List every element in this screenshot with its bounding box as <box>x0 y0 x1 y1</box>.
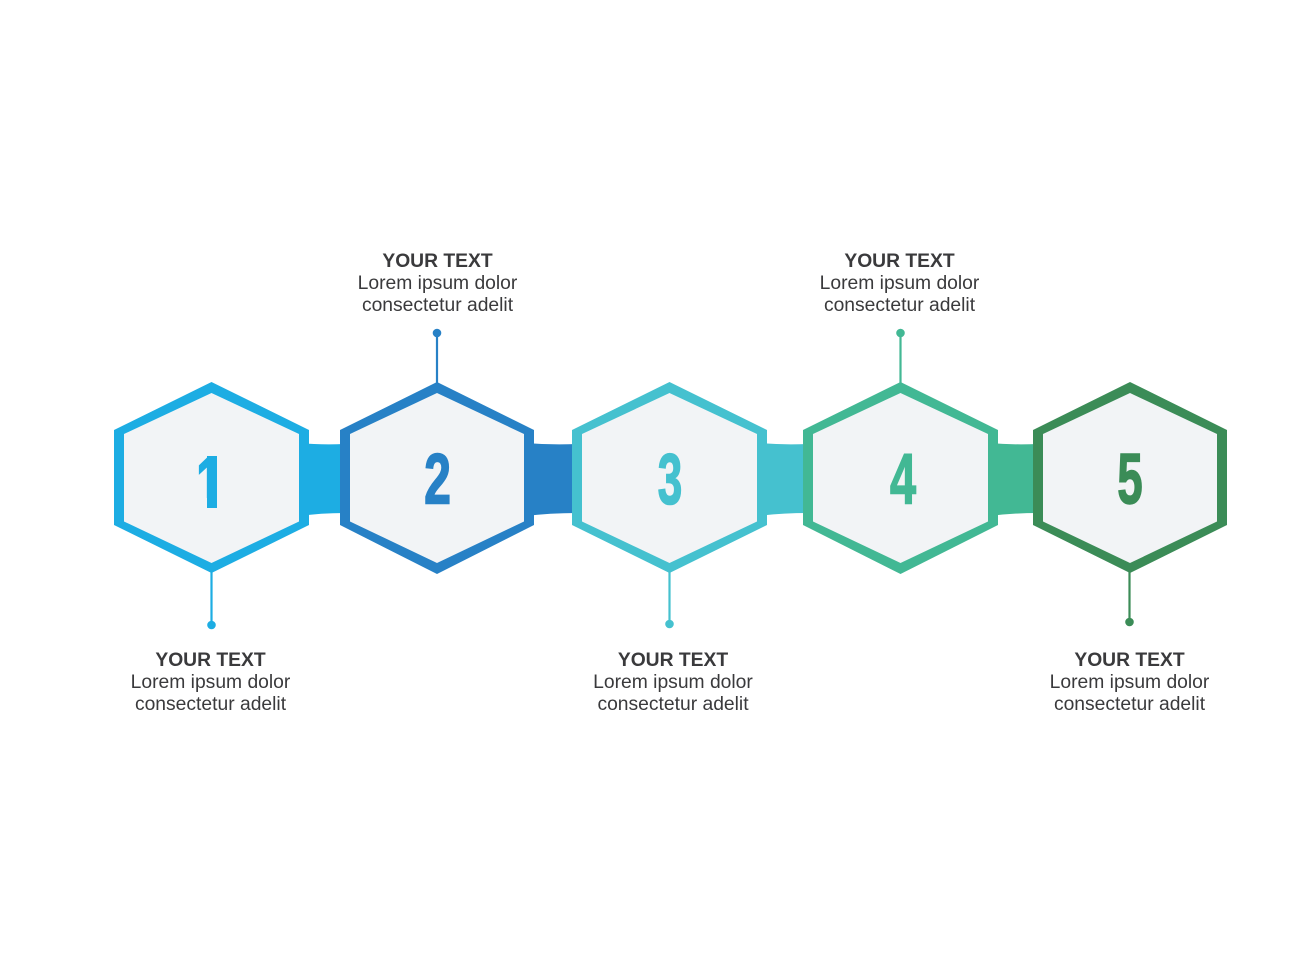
number 2: 2 <box>424 439 451 519</box>
hexagon 2 <box>340 382 534 574</box>
step 3: hexagon, number, callout <box>572 382 767 715</box>
hexagon 4 <box>803 382 998 574</box>
step 1: hexagon, number, callout <box>114 382 309 715</box>
step 5: hexagon, number, callout <box>1033 382 1227 715</box>
text block 3: YOUR TEXT <box>618 650 728 671</box>
text block 2 <box>358 251 518 316</box>
text block 4 <box>820 251 980 316</box>
hexagon 5 <box>1033 382 1227 573</box>
stem and dot 1 <box>207 570 216 629</box>
number 3: 3 <box>658 440 682 519</box>
number 4: 4 <box>890 440 916 519</box>
stem and dot 3 <box>665 570 674 628</box>
connector: 4 to 5 <box>989 443 1038 516</box>
step 2: hexagon, number, callout <box>340 251 534 574</box>
text block 1 <box>131 650 291 715</box>
text block 5 <box>1050 650 1210 715</box>
hexagon 1 <box>114 382 309 573</box>
text block 1: YOUR TEXT <box>155 650 266 671</box>
text block 5: consectetur adelit <box>1054 694 1206 715</box>
text block 2: Lorem ipsum dolor <box>358 273 518 294</box>
connector: 3 to 4 <box>758 443 808 516</box>
text block 4: Lorem ipsum dolor <box>820 273 980 294</box>
text block 3: consectetur adelit <box>597 694 749 715</box>
text block 4: consectetur adelit <box>824 295 976 316</box>
text block 1: consectetur adelit <box>135 694 287 715</box>
text block 5: YOUR TEXT <box>1074 650 1185 671</box>
text block 2: consectetur adelit <box>362 295 514 316</box>
text block 2: YOUR TEXT <box>382 251 493 272</box>
text block 4: YOUR TEXT <box>844 251 955 272</box>
connector: 1 to 2 <box>300 443 345 516</box>
connector: 2 to 3 <box>525 443 577 516</box>
stem and dot 2 <box>433 329 441 386</box>
text block 3 <box>593 650 753 715</box>
text block 5: Lorem ipsum dolor <box>1050 672 1210 693</box>
step 4: hexagon, number, callout <box>803 251 998 574</box>
number 5: 5 <box>1117 439 1143 519</box>
number 1: 1 <box>196 443 223 522</box>
text block 3: Lorem ipsum dolor <box>593 672 753 693</box>
stem and dot 5 <box>1125 570 1134 626</box>
hexagon 3 <box>572 382 767 573</box>
text block 1: Lorem ipsum dolor <box>131 672 291 693</box>
stem and dot 4 <box>896 329 905 386</box>
